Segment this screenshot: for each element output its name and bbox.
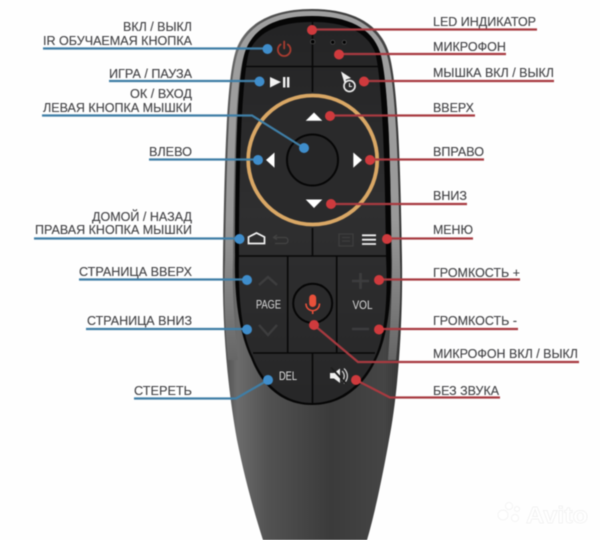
- callout: menu: [382, 222, 473, 244]
- remote body: [223, 9, 402, 540]
- callout: page up: СТРАНИЦА ВВЕРХ: [79, 264, 192, 279]
- callout: volume up: [374, 265, 520, 285]
- callout: home back: ПРАВАЯ КНОПКА МЫШКИ: [35, 222, 192, 237]
- icon: power: [278, 42, 290, 56]
- page label: PAGE: [256, 300, 281, 312]
- callout: left: [149, 144, 263, 165]
- gold d-pad ring: [248, 96, 377, 224]
- callout: microphone: МИКРОФОН: [433, 39, 506, 54]
- callout: ok: ЛЕВАЯ КНОПКА МЫШКИ: [43, 100, 192, 115]
- left callouts: [34, 19, 309, 398]
- callout: play pause: [109, 66, 264, 86]
- watermark: avito: Avito: [526, 502, 588, 528]
- remote control: [223, 9, 402, 540]
- callout: down: ВНИЗ: [433, 188, 467, 203]
- watermark: avito: [498, 502, 588, 528]
- icon: menu: [362, 235, 376, 244]
- icon: volume plus: [352, 273, 369, 289]
- callout: right: ВПРАВО: [433, 144, 484, 159]
- callout: page down: [86, 313, 252, 334]
- callout: microphone toggle: [309, 320, 579, 362]
- callout: volume down: ГРОМКОСТЬ -: [433, 313, 517, 328]
- callout: page up: [79, 264, 252, 285]
- callout: ok: [42, 86, 309, 153]
- callout: volume up: ГРОМКОСТЬ +: [433, 265, 520, 280]
- callout: microphone toggle: МИКРОФОН ВКЛ / ВЫКЛ: [433, 346, 578, 361]
- del label: DEL: [279, 371, 297, 383]
- callout: microphone: [334, 39, 506, 60]
- icon: page down: [259, 325, 277, 335]
- callout: power and ir: IR ОБУЧАЕМАЯ КНОПКА: [43, 33, 192, 48]
- callout: led: [307, 14, 537, 35]
- callout: up: [325, 100, 475, 121]
- icon: volume minus: [352, 328, 369, 330]
- callout: volume down: [374, 313, 518, 334]
- callout: down: [326, 188, 467, 209]
- icon: guide: [339, 234, 353, 246]
- right callouts: [307, 14, 579, 398]
- silver rim: [224, 11, 400, 360]
- callout: ok: ОК / ВХОД: [130, 86, 192, 101]
- callout: home back: ДОМОЙ / НАЗАД: [92, 209, 192, 224]
- callout: right: [365, 144, 484, 165]
- callout: up: ВВЕРХ: [433, 100, 474, 115]
- callout: menu: МЕНЮ: [433, 222, 473, 237]
- led and microphone holes: [310, 40, 346, 44]
- callout: mouse: МЫШКА ВКЛ / ВЫКЛ: [433, 65, 554, 80]
- callout: play pause: ИГРА / ПАУЗА: [109, 66, 192, 81]
- button panel: [239, 22, 387, 403]
- d-pad arrows: [266, 112, 362, 208]
- icon: page up: [259, 277, 277, 285]
- callout: led: LED ИНДИКАТОР: [433, 14, 536, 29]
- microphone button: [293, 284, 332, 323]
- callout: delete: [134, 375, 273, 398]
- callout: mouse: [359, 65, 554, 86]
- icon: home: [248, 233, 264, 244]
- callout: delete: СТЕРЕТЬ: [134, 383, 192, 398]
- ok button: [287, 134, 338, 186]
- button dividers: [239, 22, 386, 403]
- volume label: VOL: [352, 300, 373, 312]
- callout: power and ir: ВКЛ / ВЫКЛ: [123, 19, 192, 34]
- callout: page down: СТРАНИЦА ВНИЗ: [87, 313, 192, 328]
- black frame: [235, 16, 391, 405]
- callout: power and ir: [43, 19, 272, 54]
- callout: mute: БЕЗ ЗВУКА: [433, 383, 499, 398]
- icon: mute: [330, 368, 347, 384]
- icon: mouse toggle: [341, 72, 355, 92]
- icon: back: [274, 235, 288, 244]
- callout: left: ВЛЕВО: [149, 144, 192, 159]
- icon: play pause: [270, 77, 289, 88]
- callout: home back: [34, 209, 244, 244]
- callout: mute: [351, 375, 500, 398]
